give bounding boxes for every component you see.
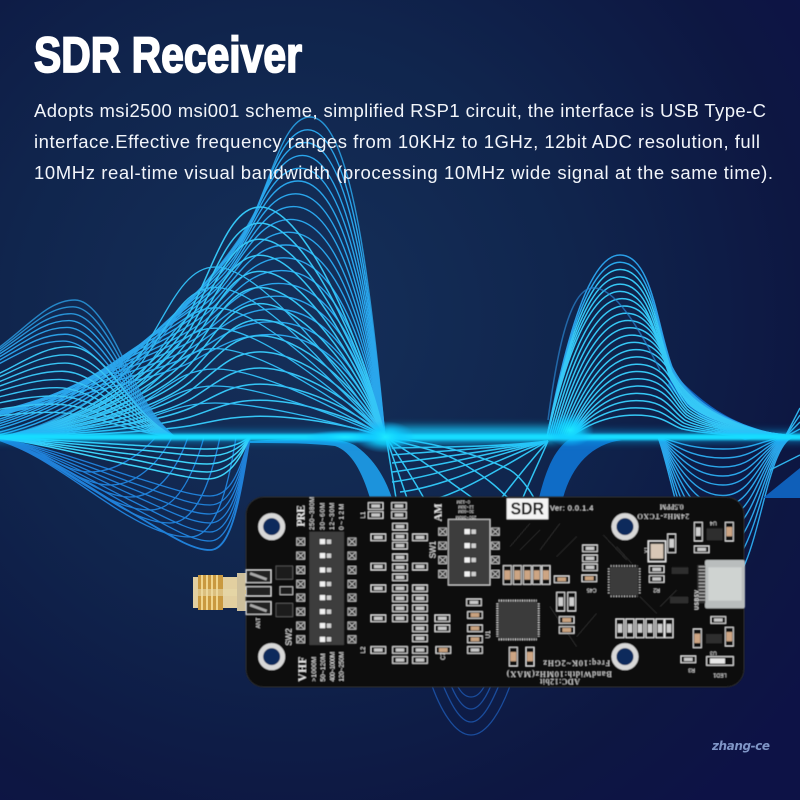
- silkscreen labels left: 400~1000M: [329, 652, 336, 682]
- USB Type-C connector: [697, 560, 745, 608]
- DIP switch: 4 way: [439, 519, 499, 585]
- title: SDR Receiver: [34, 27, 302, 83]
- silkscreen labels left: 250~380M: [455, 515, 476, 520]
- silkscreen labels right: R3: [688, 666, 695, 672]
- silkscreen labels left: >1000M: [311, 657, 318, 682]
- wave: right edge rising lines: [763, 408, 800, 498]
- wave: right peak: [547, 255, 800, 437]
- wave: band rising into the right peak: [539, 436, 622, 498]
- silkscreen labels right: X1: [644, 547, 650, 553]
- silkscreen labels right: LED1: [713, 671, 727, 677]
- silkscreen labels left: 120~250M: [339, 652, 346, 682]
- silkscreen labels left: 50~120M: [320, 653, 327, 682]
- silkscreen labels left: C7: [441, 652, 447, 660]
- silkscreen labels left: 30~60M: [458, 509, 474, 514]
- SMA antenna connector: [193, 573, 261, 611]
- silkscreen labels left: U1: [486, 630, 492, 638]
- silkscreen labels right: 0.5PPM: [659, 503, 684, 512]
- silkscreen labels left: 12~30M: [329, 503, 336, 530]
- RF switch parts: [276, 566, 293, 617]
- silkscreen labels left: PRE: [296, 505, 308, 527]
- silkscreen labels right: BandWidth:10MHz(MAX): [507, 669, 612, 678]
- mounting holes right: [614, 516, 636, 668]
- wave: lower right lobe: [658, 437, 793, 587]
- secondary chip: [609, 566, 640, 596]
- SDR label: SDR: [511, 499, 544, 519]
- silkscreen labels left: [256, 497, 492, 682]
- silkscreen labels left: 12~30M: [458, 504, 474, 509]
- passive components: [368, 503, 482, 663]
- silkscreen labels right: Freq:10K~2GHz: [543, 658, 610, 667]
- glowing baseline: [0, 413, 800, 453]
- right half of the board: [497, 498, 745, 686]
- antenna pads: [246, 570, 271, 614]
- wave: lower left lobe: [0, 437, 250, 550]
- main chip: [497, 601, 539, 639]
- DIP switch: 8 way: [297, 532, 356, 645]
- silkscreen labels left: 0~12M: [456, 500, 470, 505]
- silkscreen labels right: USB5V: [694, 590, 700, 610]
- silkscreen labels left: L2: [361, 646, 367, 653]
- mounting holes left: [261, 516, 283, 668]
- wave: inner nested arches of the central peak: [0, 207, 385, 437]
- silkscreen labels left: 0~12M: [338, 504, 345, 530]
- silkscreen labels left: VHF: [297, 657, 309, 682]
- silkscreen labels left: 250~380M: [309, 497, 316, 530]
- crystal oscillator: [648, 541, 666, 562]
- PCB traces: [510, 523, 677, 647]
- wave: crossing grid arches of the central peak: [0, 267, 385, 437]
- board outline: [246, 497, 744, 687]
- transistors: [670, 528, 723, 643]
- silkscreen labels left: 30~60M: [319, 503, 326, 530]
- description text: [34, 100, 773, 183]
- watermark: zhang-ce: [711, 739, 770, 753]
- description text: interface.Effective frequency ranges from 10KHz to 1GHz, 12bit ADC resolution, full: [34, 131, 760, 152]
- status LED: [707, 657, 733, 665]
- silkscreen labels right: U3: [710, 650, 717, 656]
- wave: large central peak: [0, 117, 385, 437]
- wave: left small peaks: [0, 300, 175, 437]
- silkscreen labels left: SW1: [428, 540, 437, 558]
- silkscreen labels right: C45: [587, 586, 597, 592]
- description text: 10MHz real-time visual bandwidth (processing 10MHz wide signal at the same time).: [34, 162, 773, 183]
- wave: band on the falling side of the right peak: [668, 372, 775, 440]
- left half of the board: [246, 497, 499, 682]
- silkscreen labels right: 24MHz-TCXO: [637, 512, 689, 521]
- silkscreen labels left: ANT: [256, 617, 262, 628]
- silkscreen labels right: [507, 503, 727, 686]
- silkscreen labels right: ADC:12bit: [539, 677, 580, 686]
- circuit board: [246, 497, 745, 687]
- description text: Adopts msi2500 msi001 scheme, simplified RSP1 circuit, the interface is USB Type-C: [34, 100, 766, 121]
- silkscreen labels left: SW2: [285, 628, 294, 646]
- silkscreen labels left: AM: [433, 504, 444, 521]
- silkscreen labels left: L1: [361, 511, 367, 518]
- wave: falling band behind the board: [250, 439, 392, 498]
- wave: lobe visible below the board: [430, 680, 512, 735]
- silkscreen labels right: U4: [710, 520, 717, 526]
- wave: fan between the two pinch points: [386, 437, 548, 503]
- silkscreen labels right: R2: [653, 586, 660, 592]
- version label: Ver: 0.0.1.4: [550, 504, 593, 513]
- passive components right: [503, 522, 733, 666]
